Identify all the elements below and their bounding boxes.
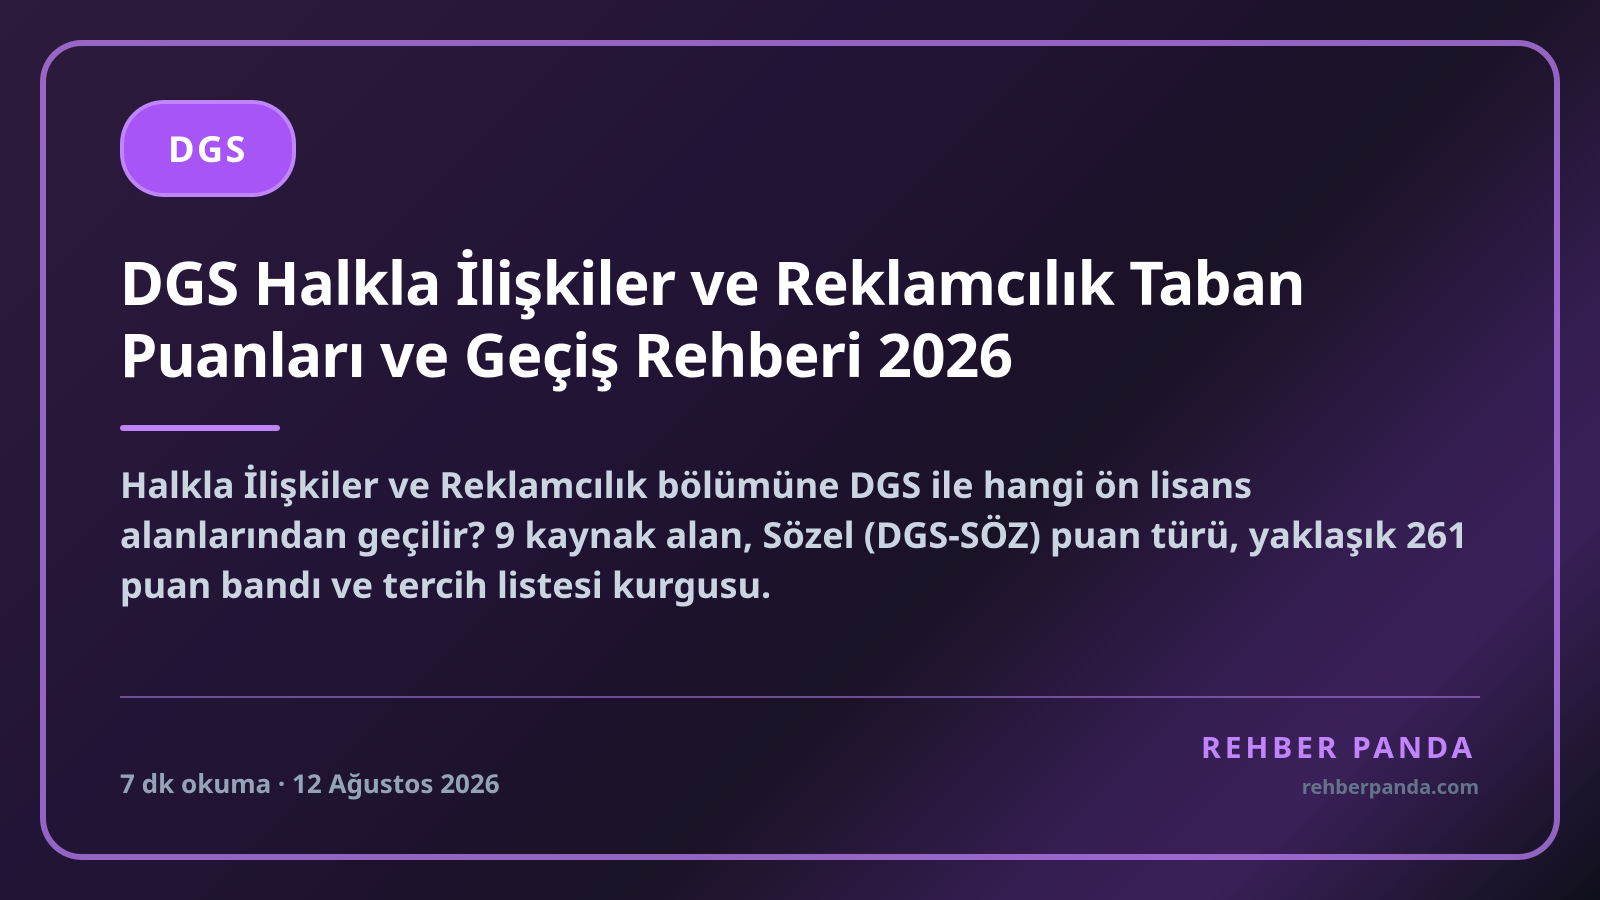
footer divider bbox=[120, 696, 1480, 698]
title bbox=[120, 241, 1305, 395]
accent rule bbox=[120, 425, 280, 431]
category badge bbox=[120, 100, 296, 197]
title: Puanları ve Geçiş Rehberi 2026 bbox=[120, 313, 1012, 395]
description: Halkla İlişkiler ve Reklamcılık bölümüne DGS ile hangi ön lisans bbox=[120, 460, 1252, 509]
reading time and date: 7 dk okuma · 12 Ağustos 2026 bbox=[120, 765, 500, 801]
description: puan bandı ve tercih listesi kurgusu. bbox=[120, 560, 771, 609]
description: alanlarından geçilir? 9 kaynak alan, Sözel (DGS-SÖZ) puan türü, yaklaşık 261 bbox=[120, 510, 1468, 559]
title: DGS Halkla İlişkiler ve Reklamcılık Taban bbox=[120, 241, 1305, 323]
website: rehberpanda.com bbox=[1302, 773, 1479, 800]
category badge: DGS bbox=[168, 124, 248, 173]
brand name: REHBER PANDA bbox=[1201, 726, 1476, 767]
description bbox=[120, 460, 1468, 609]
